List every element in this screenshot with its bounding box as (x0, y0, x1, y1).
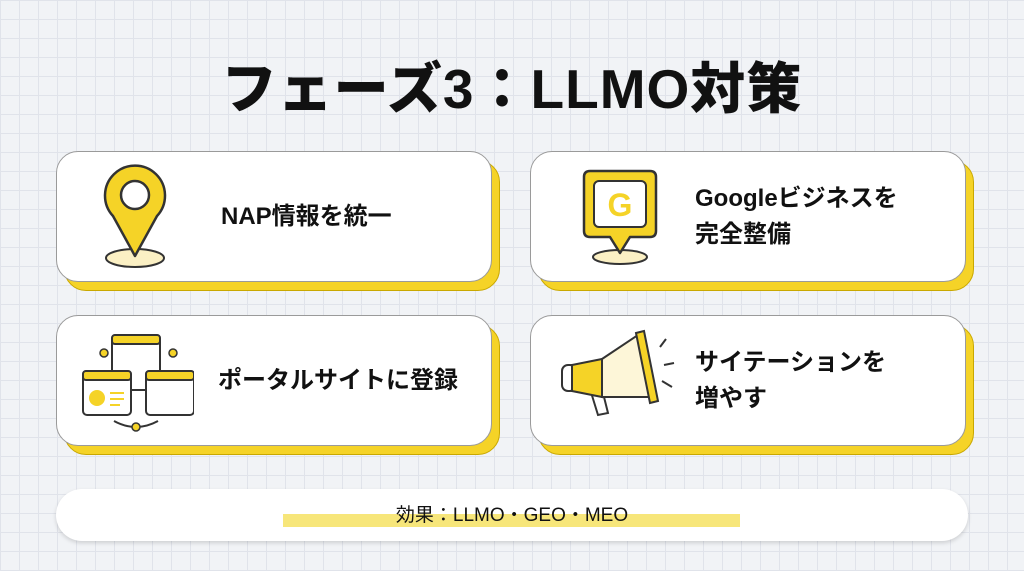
text: portal: ポータルサイトに登録 (218, 366, 458, 394)
icon: megaphone (561, 330, 674, 416)
panel: citation (530, 315, 974, 455)
icon: google pin (582, 170, 658, 265)
text: effect: 効果：LLMO・GEO・MEO (396, 505, 628, 526)
text: citation (695, 348, 886, 412)
icon: portal windows (82, 334, 194, 432)
text: Google (695, 184, 898, 248)
icon: google pin: G (608, 187, 632, 223)
text: Google: Googleビジネスを (695, 184, 898, 212)
icon: map pin (104, 164, 166, 268)
title: フェーズ3：LLMO対策 (222, 58, 802, 120)
text: citation: 増やす (695, 384, 767, 412)
callout: effect (56, 489, 968, 541)
panel: Google (530, 151, 974, 291)
panel: portal (56, 315, 500, 455)
text: NAP: NAP情報を統一 (221, 202, 392, 230)
text: Google: 完全整備 (695, 220, 791, 248)
panel: NAP (56, 151, 500, 291)
text: citation: サイテーションを (695, 348, 886, 376)
